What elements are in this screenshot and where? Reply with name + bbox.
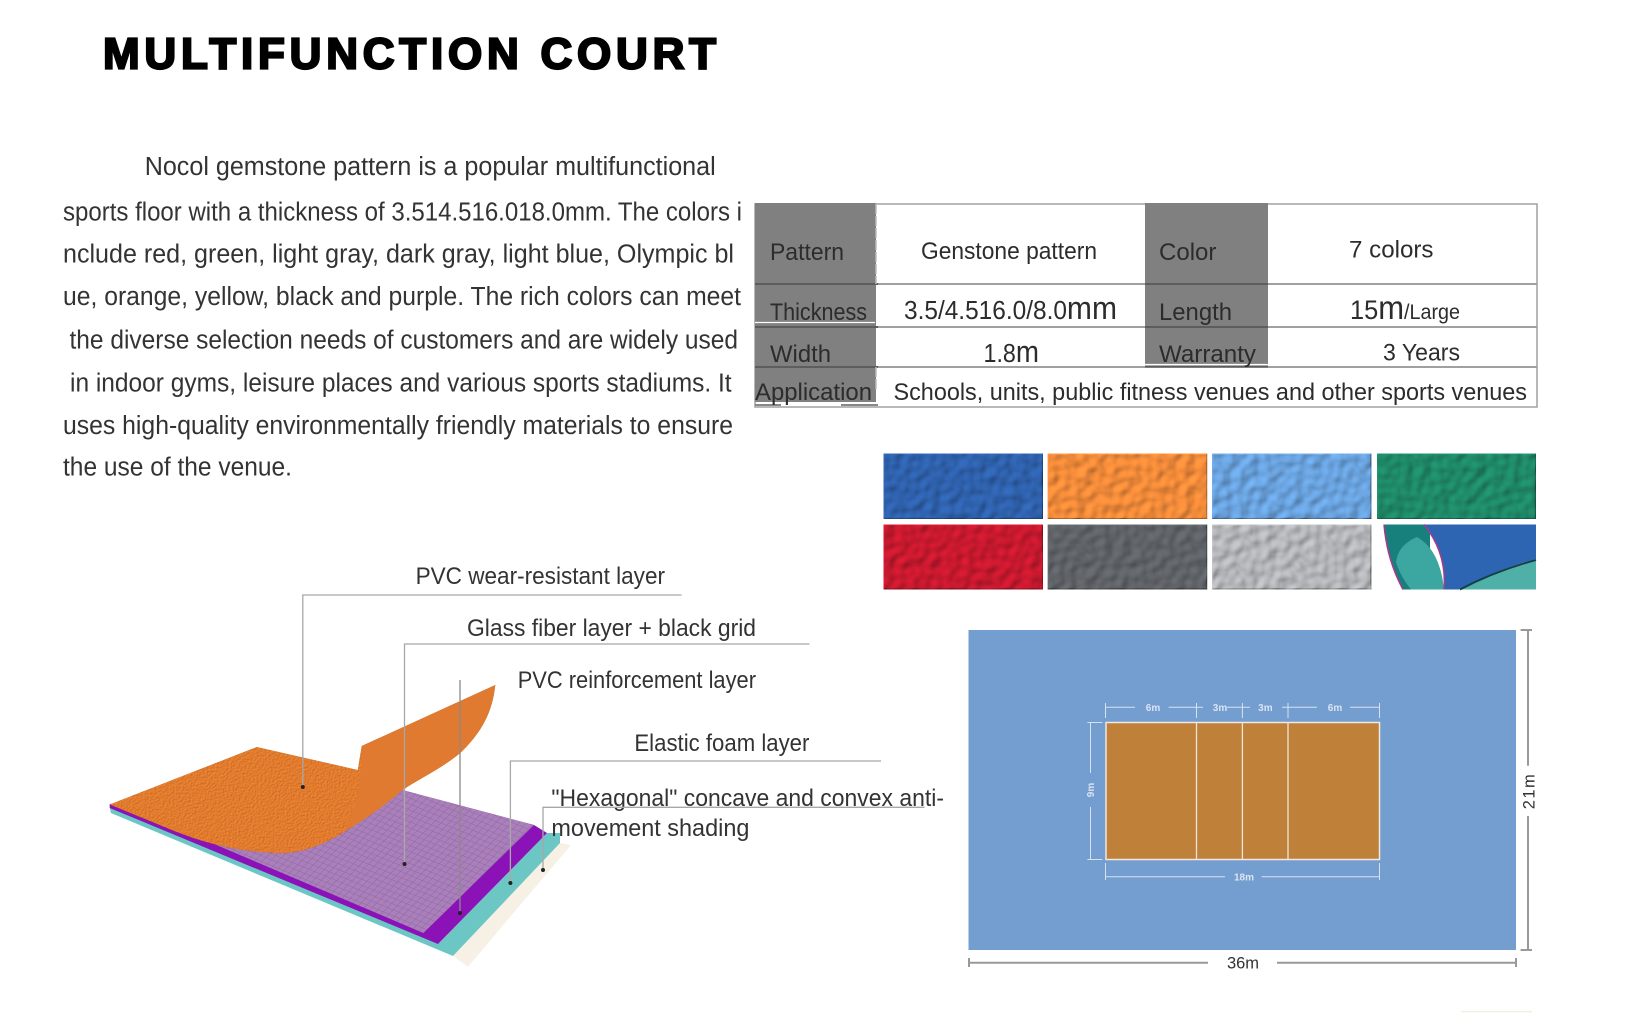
dimension: 21m — [1520, 630, 1538, 950]
cell: pattern: Pattern — [770, 239, 844, 266]
cell: thickness: 3.5/4.516.0/8.0mm — [904, 290, 1117, 326]
dimension: 36m: 36m — [1227, 954, 1259, 972]
cell: color: 7 colors — [1349, 237, 1434, 264]
top dimensions: 6m — [1328, 703, 1342, 714]
callout: elastic foam layer: Elastic foam layer — [634, 730, 809, 757]
dimension: 36m — [969, 954, 1516, 972]
top dimensions: 6m — [1146, 703, 1160, 714]
layer: orange wear surface — [110, 685, 495, 853]
cell: color: Color — [1159, 239, 1216, 266]
swatch: light gray — [1212, 524, 1372, 590]
cell: warranty: 3 Years — [1383, 340, 1460, 367]
header column: left — [755, 203, 876, 402]
text block: product description: uses high-quality environmentally friendly materials to ensure — [63, 412, 733, 440]
layer: glass fiber grid — [120, 790, 534, 933]
swatch: orange — [1048, 454, 1207, 519]
text block: product description: ue, orange, yellow, black and purple. The rich colors can meet — [63, 283, 741, 311]
swatch: red — [884, 524, 1043, 590]
callout: PVC wear-resistant layer: PVC wear-resistant layer — [416, 563, 665, 590]
text block: product description: sports floor with a thickness of 3.514.516.018.0mm. The colors i — [63, 199, 742, 227]
cell: length: 15m/Large — [1350, 289, 1460, 326]
callout: glass fiber layer — [402, 615, 810, 866]
cell: width — [770, 334, 1039, 369]
orange playing court — [1106, 722, 1380, 860]
cell: width: Width — [770, 341, 831, 368]
cell: application: Schools, units, public fitness venues and other sports venues — [894, 379, 1527, 406]
callout: hexagonal shading: "Hexagonal" concave and convex anti- — [551, 785, 944, 812]
callout: elastic foam layer — [508, 730, 881, 885]
text block: product description: the diverse selection needs of customers and are widely used — [70, 327, 738, 355]
text block: product description: in indoor gyms, leisure places and various sports stadiums. It — [70, 370, 732, 398]
flap highlight — [345, 685, 495, 830]
callout: PVC wear-resistant layer — [301, 563, 682, 789]
callout: PVC reinforcement layer: PVC reinforcement layer — [518, 667, 756, 694]
bottom dimension: 18m — [1234, 872, 1254, 883]
callout: hexagonal shading: movement shading — [551, 815, 749, 842]
swatch: green — [1377, 454, 1536, 519]
bottom dimension — [1106, 863, 1380, 883]
text block: product description — [63, 153, 742, 482]
cell: application: Application — [755, 379, 872, 406]
text block: product description: the use of the venue. — [63, 454, 292, 482]
top dimensions — [1106, 703, 1380, 718]
cell: pattern: Genstone pattern — [921, 238, 1097, 265]
layered flooring diagram — [110, 563, 944, 967]
top dimensions: 3m — [1213, 703, 1227, 714]
cell: thickness — [770, 290, 1117, 326]
specification table — [755, 203, 1537, 407]
cell: warranty: Warranty — [1159, 341, 1256, 368]
header column: right — [1145, 203, 1268, 364]
swatch: blue — [884, 454, 1043, 519]
callout: PVC reinforcement layer — [458, 667, 756, 915]
cell: width: 1.8m — [984, 334, 1039, 369]
court dimension diagram — [968, 630, 1538, 972]
layer: cream base — [453, 843, 571, 967]
cell: length: Length — [1159, 299, 1232, 326]
title: MULTIFUNCTION COURT — [103, 30, 716, 78]
swatch: dark gray — [1048, 524, 1207, 590]
swatch: light blue — [1212, 454, 1372, 519]
top dimensions: 3m — [1258, 703, 1273, 714]
layer: teal foam — [110, 807, 560, 956]
cell: thickness: Thickness — [770, 299, 867, 326]
text block: product description: nclude red, green, light gray, dark gray, light blue, Olympic bl — [63, 241, 734, 269]
cell: pattern — [770, 238, 1097, 266]
layer: purple reinforcement — [110, 790, 547, 944]
cell: warranty — [1159, 340, 1460, 368]
surrounding blue floor — [968, 630, 1516, 950]
text block: product description: Nocol gemstone pattern is a popular multifunctional — [145, 153, 716, 181]
cell: color — [1159, 237, 1434, 266]
colour swatches — [884, 454, 1536, 590]
swatch: rolled flooring sample — [1384, 524, 1536, 590]
left dimension: 9m — [1086, 783, 1097, 797]
cell: length — [1159, 289, 1460, 326]
left dimension — [1086, 722, 1102, 860]
callout: glass fiber layer: Glass fiber layer + black grid — [467, 615, 756, 642]
callout: hexagonal shading — [541, 785, 944, 872]
dimension: 21m: 21m — [1520, 773, 1538, 809]
